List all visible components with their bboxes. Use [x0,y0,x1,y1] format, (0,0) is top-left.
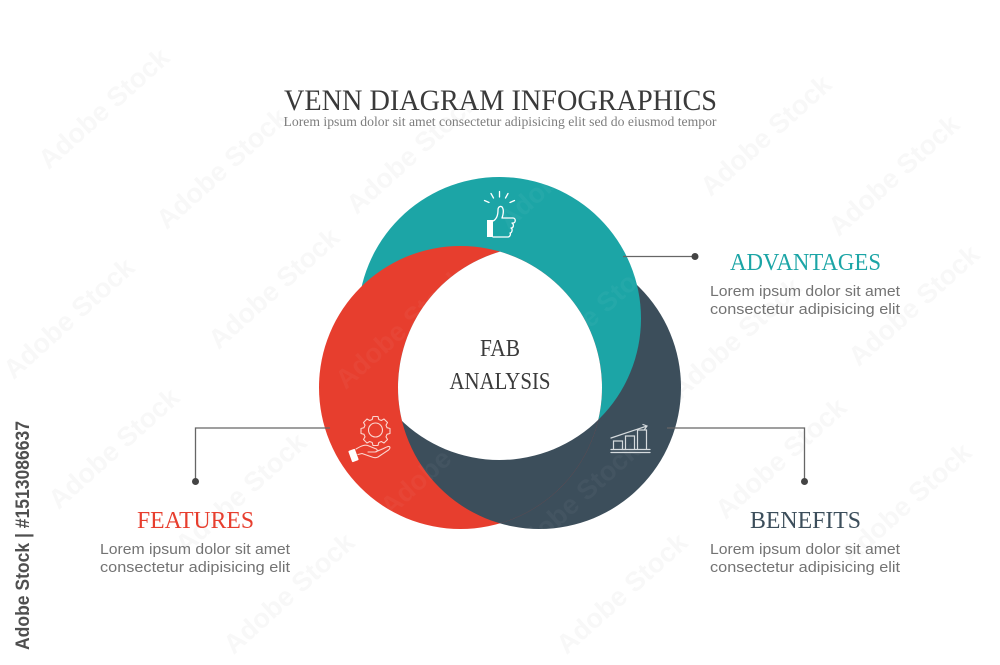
heading: advantages: ADVANTAGES [730,250,881,276]
text: advantages description [710,283,901,318]
watermark pattern on background: Adobe Stock [170,426,313,560]
watermark over diagram: Adobe Stock [523,246,666,380]
circle: advantages [358,177,641,460]
watermark over diagram: Adobe Stock [493,101,636,235]
text: benefits description: consectetur adipisicing elit [710,559,901,576]
watermark pattern on background: Adobe Stock [823,108,966,242]
text: advantages description: Lorem ipsum dolor sit amet [710,283,901,300]
heading: features: FEATURES [137,508,254,534]
text: advantages description: consectetur adipisicing elit [710,301,901,318]
center white triple overlap [398,252,602,460]
center label: ANALYSIS [450,369,550,395]
watermark pattern on background: Adobe Stock [551,526,694,660]
watermark pattern on background: Adobe Stock [218,526,361,660]
text: features description: consectetur adipisicing elit [100,559,291,576]
icon: gear in hand [348,416,390,462]
connector: features [192,428,330,485]
text: features description [100,541,291,576]
watermark pattern on background: Adobe Stock [203,221,346,355]
watermark pattern on background: Adobe Stock [151,101,294,235]
connector: benefits [667,428,808,485]
watermark pattern on background: Adobe Stock [43,381,186,515]
watermark pattern on background: Adobe Stock [695,68,838,202]
venn diagram [319,177,681,529]
watermark over diagram: Adobe Stock [375,388,518,522]
connector: advantages [623,253,698,260]
circle: features [319,246,602,529]
benefits overlap over features [398,252,602,524]
watermark over diagram [330,101,666,568]
icon: thumbs up [484,192,515,237]
heading: benefits: BENEFITS [750,508,861,534]
watermark pattern on background: Adobe Stock [835,436,978,570]
watermark pattern on background: Adobe Stock [665,271,808,405]
watermark pattern on background: Adobe Stock [0,251,141,385]
icon: rising bar chart [611,424,650,452]
center label [450,336,550,395]
watermark over diagram: Adobe Stock [330,261,473,395]
subtitle: Lorem ipsum dolor sit amet consectetur adipisicing elit sed do eiusmod tempor [284,114,717,129]
stock id side text: Adobe Stock | #1513086637 [13,421,34,650]
center label: FAB [480,336,520,362]
watermark pattern on background: Adobe Stock [33,41,176,175]
circle: benefits [398,246,681,529]
label: benefits [710,508,901,576]
text: benefits description: Lorem ipsum dolor sit amet [710,541,901,558]
watermark pattern on background: Adobe Stock [843,238,986,372]
watermark over diagram: Adobe Stock [503,434,646,568]
text: features description: Lorem ipsum dolor sit amet [100,541,291,558]
infographic canvas [15,90,900,650]
title: VENN DIAGRAM INFOGRAPHICS [284,84,717,117]
label: features [100,508,291,576]
text: benefits description [710,541,901,576]
watermark pattern on background: Adobe Stock [341,86,484,220]
label: advantages [710,250,901,318]
watermark pattern on background: Adobe Stock [710,391,853,525]
